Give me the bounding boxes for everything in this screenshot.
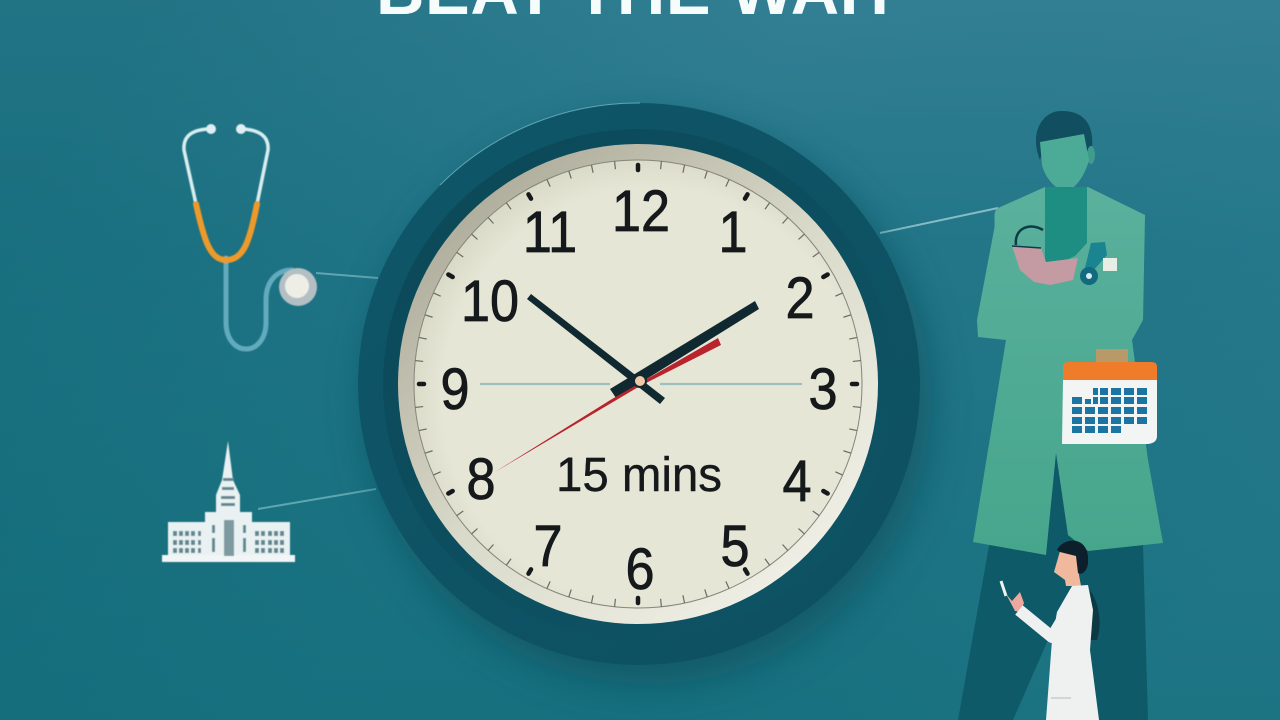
center cap bbox=[634, 375, 646, 387]
doctor figure bbox=[958, 111, 1163, 720]
nurse back hair bbox=[1090, 590, 1100, 640]
calendar page bbox=[1062, 380, 1157, 444]
clock numerals bbox=[440, 178, 838, 602]
horizontal reference line bbox=[480, 383, 802, 385]
clock numerals: 8 bbox=[466, 446, 496, 512]
calendar header bbox=[1063, 362, 1157, 380]
nurse face bbox=[1054, 551, 1081, 586]
doctor face bbox=[1040, 134, 1089, 191]
clock numerals: 7 bbox=[533, 513, 563, 579]
clock outer ring bbox=[358, 103, 920, 665]
doctor hair bbox=[1036, 111, 1092, 160]
clock face bbox=[414, 160, 862, 608]
icon: calendar bbox=[1062, 349, 1157, 444]
nurse hand and phone bbox=[1001, 581, 1024, 612]
clock numerals: 4 bbox=[782, 448, 812, 514]
icon: hospital building bbox=[162, 441, 295, 562]
second hand bbox=[495, 338, 721, 472]
doctor ear bbox=[1087, 146, 1095, 164]
calendar tab bbox=[1096, 349, 1128, 363]
clock bbox=[358, 103, 930, 684]
clock numerals: 5 bbox=[720, 513, 750, 579]
connector: stethoscope to clock bbox=[316, 273, 378, 278]
clock numerals: 2 bbox=[785, 265, 815, 331]
clock numerals: 11 bbox=[523, 199, 577, 265]
doctor legs bbox=[958, 440, 1148, 720]
connector: hospital to clock bbox=[258, 489, 376, 509]
minute hand bbox=[527, 294, 665, 404]
clock rim bbox=[398, 144, 878, 624]
clock numerals: 6 bbox=[625, 536, 655, 602]
calendar grid bbox=[1072, 388, 1147, 433]
nurse pocket bbox=[1051, 697, 1071, 699]
nurse figure bbox=[1001, 541, 1100, 720]
clock shadow bbox=[366, 120, 930, 684]
nurse white coat bbox=[1019, 585, 1099, 720]
doctor scrubs bbox=[1045, 187, 1087, 265]
nurse hair bbox=[1057, 541, 1088, 574]
clock numerals: 10 bbox=[461, 268, 519, 334]
minute ticks bbox=[415, 161, 861, 607]
clock numerals: 12 bbox=[612, 178, 670, 244]
duration label: 15 mins bbox=[556, 449, 722, 502]
hour ticks bbox=[419, 165, 857, 603]
icon: stethoscope bbox=[184, 124, 317, 349]
doctor coat bbox=[973, 187, 1163, 555]
clock numerals: 1 bbox=[718, 199, 748, 265]
clock ring highlight bbox=[440, 103, 640, 185]
clock numerals: 3 bbox=[808, 356, 838, 422]
doctor hands and tablet bbox=[1012, 226, 1078, 285]
hour hand bbox=[610, 301, 759, 398]
doctor pocket stethoscope bbox=[1080, 242, 1117, 285]
clock numerals: 9 bbox=[440, 356, 470, 422]
connector: doctor to clock bbox=[880, 208, 998, 233]
clock inner ring bbox=[383, 129, 893, 639]
